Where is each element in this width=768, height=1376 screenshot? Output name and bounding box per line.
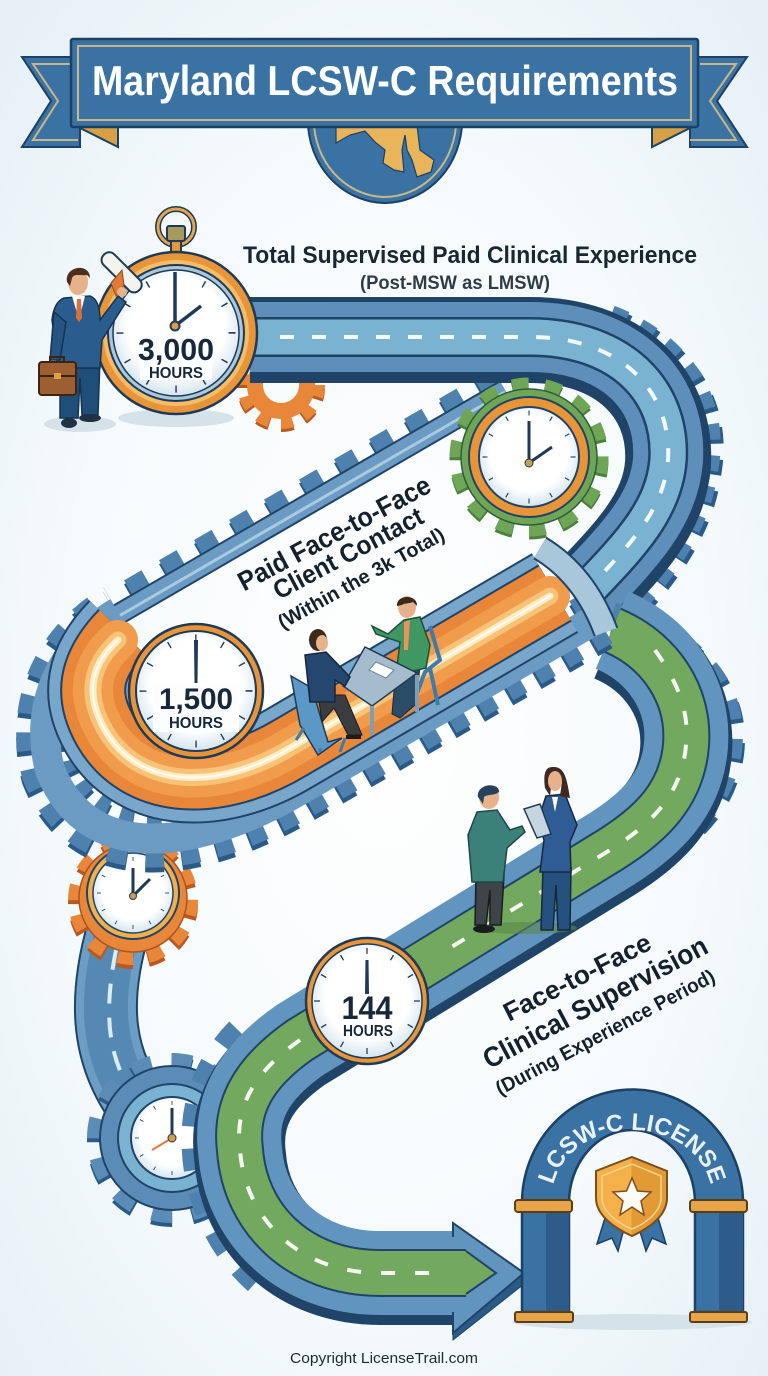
ribbon tail right (690, 57, 747, 147)
pipe collar (540, 548, 606, 632)
label: face-to-face clinical supervision: (During Experience Period) (492, 966, 719, 1100)
icon: license badge (596, 1157, 667, 1251)
label: paid face-to-face client contact: Client Contact (268, 501, 429, 605)
left chair (291, 676, 342, 755)
arch lettering (552, 1130, 712, 1197)
clock: 1,500 hours: HOURS (169, 715, 223, 732)
label: paid face-to-face client contact: (Within the 3k Total) (274, 524, 449, 634)
gear clock: orange (77, 844, 189, 960)
heading: total experience (243, 242, 697, 294)
figures: client meeting at table (291, 596, 440, 755)
figure: professional with diploma (39, 249, 145, 428)
left teeth (196, 1032, 258, 1280)
state badge (308, 125, 462, 203)
clock: 3,000 hours stopwatch: HOURS (149, 365, 203, 382)
arrowhead (453, 1273, 524, 1340)
label: face-to-face clinical supervision: Face-to-Face (498, 927, 656, 1027)
supervisee (468, 785, 525, 933)
gear clock: blue (97, 1063, 247, 1217)
meeting table (343, 647, 417, 706)
gear clock: green (458, 386, 600, 531)
briefcase (39, 357, 76, 395)
copyright footer: Copyright LicenseTrail.com (290, 1350, 478, 1367)
title: Maryland LCSW-C Requirements (92, 57, 678, 104)
road: green supervision track (196, 616, 731, 1340)
figures: supervision conversation (468, 767, 577, 934)
ribbon fold right (652, 127, 692, 147)
label: paid face-to-face client contact: Paid Face-to-Face (233, 470, 436, 597)
belt: upper toothed strip (100, 378, 505, 627)
person in green (372, 596, 430, 718)
clock: 144 hours: 144 (342, 990, 393, 1026)
right teeth (614, 620, 731, 859)
gear: orange behind stopwatch (244, 348, 318, 425)
ribbon tail left (22, 57, 80, 147)
small road: lower left (106, 930, 145, 1115)
clock: 144 hours (306, 938, 428, 1064)
ground shadows (44, 409, 752, 1330)
clock: 1,500 hours (129, 624, 263, 758)
person in navy (305, 629, 362, 739)
clock: 144 hours: HOURS (343, 1023, 393, 1040)
license arch (514, 1088, 748, 1323)
pillar caps and bases (515, 1200, 747, 1322)
belt: orange client contact track (45, 593, 598, 844)
clock: 1,500 hours: 1,500 (159, 683, 233, 716)
ribbon fold left (78, 127, 118, 147)
icon: Maryland map (336, 125, 434, 177)
banner body (71, 39, 698, 127)
title banner (22, 39, 747, 203)
stopwatch crown (158, 209, 194, 252)
clock: 3,000 hours stopwatch (95, 209, 257, 414)
diploma scroll (99, 249, 145, 295)
heading: total experience: (Post-MSW as LMSW) (360, 273, 550, 294)
belt teeth (45, 617, 598, 844)
supervisor (524, 767, 577, 930)
heading: total experience: Total Supervised Paid Clinical Experience (243, 242, 697, 269)
license arch: LCSW-C LICENSE (538, 1113, 726, 1184)
label: face-to-face clinical supervision: Clinical Supervision (477, 930, 713, 1075)
road: blue experience track (250, 318, 711, 616)
arch body (522, 1089, 743, 1312)
road teeth (613, 322, 711, 616)
clock: 3,000 hours stopwatch: 3,000 (138, 332, 214, 367)
right chair (412, 626, 440, 706)
